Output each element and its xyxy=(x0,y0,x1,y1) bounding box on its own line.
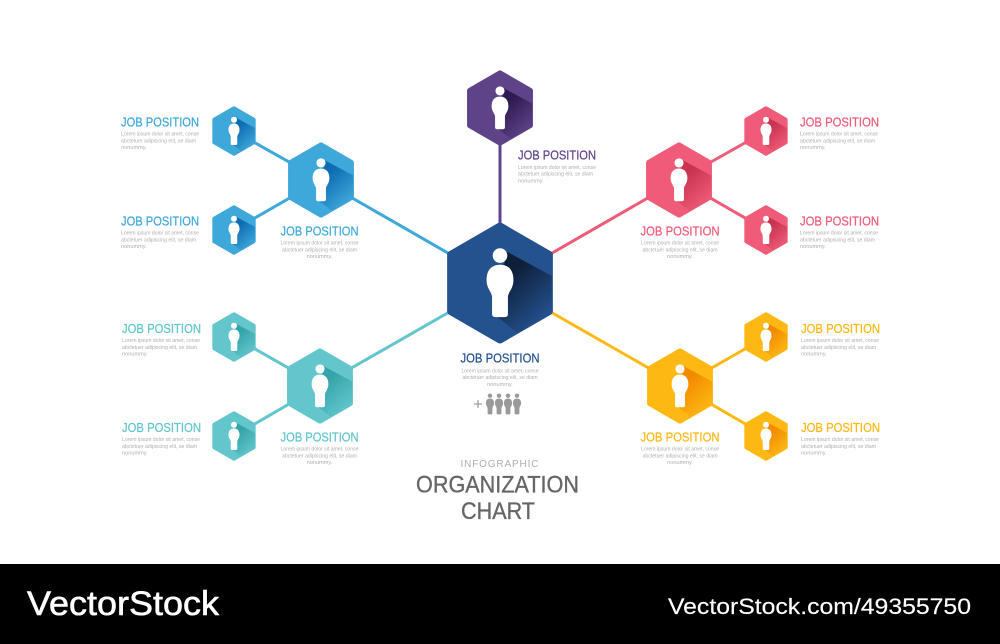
text: blue small top position: JOB POSITION xyxy=(121,116,199,130)
icon: yellow small hexagon bottom xyxy=(746,413,788,459)
connector: blue manager to center xyxy=(321,180,500,283)
icon: blue manager hexagon xyxy=(291,145,355,215)
text: blue small bottom position: nonummy. xyxy=(121,244,147,250)
text: blue manager position: abctetuer adipiscing elit, se diam xyxy=(282,247,357,253)
text: yellow manager position xyxy=(640,430,720,466)
text: yellow manager position: Lorem ipsum dolor sit amet, conse xyxy=(641,447,719,453)
text: blue small top position: nonummy. xyxy=(121,145,147,151)
title: CHART xyxy=(461,498,535,525)
text: yellow small top position: Lorem ipsum dolor sit amet, conse xyxy=(801,338,879,344)
text: teal small top position: abctetuer adipiscing elit, se diam xyxy=(122,345,197,351)
text: purple position: Lorem ipsum dolor sit amet, conse xyxy=(518,165,596,171)
connector: teal manager to center xyxy=(320,283,500,386)
text: teal manager position: JOB POSITION xyxy=(280,430,358,444)
icon: center navy hexagon with person xyxy=(451,227,555,339)
text: yellow small top position: JOB POSITION xyxy=(801,322,880,336)
text: yellow small bottom position: Lorem ipsum dolor sit amet, conse xyxy=(801,437,879,443)
text: blue manager position: Lorem ipsum dolor sit amet, conse xyxy=(280,241,358,247)
text: pink small top position: nonummy. xyxy=(800,145,826,151)
text: teal small top position xyxy=(122,322,201,358)
title: INFOGRAPHIC xyxy=(460,459,538,470)
text: purple position: nonummy. xyxy=(518,178,544,184)
text: pink small bottom position: JOB POSITION xyxy=(800,214,879,228)
connector: purple to center xyxy=(498,108,502,283)
text: center position: nonummy. xyxy=(487,382,513,388)
text: pink manager position: abctetuer adipiscing elit, se diam xyxy=(642,247,718,253)
text: blue small bottom position xyxy=(121,214,199,250)
text: yellow small bottom position: abctetuer adipiscing elit, se diam xyxy=(801,444,876,450)
text: blue small top position xyxy=(121,116,199,151)
text: blue small bottom position: abctetuer adipiscing elit, se diam xyxy=(121,237,196,243)
footer logo: VectorStock xyxy=(27,585,220,623)
text: teal small bottom position: Lorem ipsum dolor sit amet, conse xyxy=(122,437,200,443)
text: pink small top position xyxy=(800,116,879,151)
text: yellow small top position: abctetuer adipiscing elit, se diam xyxy=(801,345,876,351)
text: pink manager position: JOB POSITION xyxy=(640,224,720,238)
icon: pink small hexagon top xyxy=(746,108,788,154)
text: center position: abctetuer adipiscing elit, se diam xyxy=(462,375,538,381)
text: pink small bottom position: Lorem ipsum dolor sit amet, conse xyxy=(800,231,878,237)
connector: teal small bottom to teal manager xyxy=(234,386,320,436)
icon: yellow small hexagon top xyxy=(746,314,788,360)
text: yellow small bottom position xyxy=(801,421,880,456)
text: yellow manager position: JOB POSITION xyxy=(640,430,720,444)
text: teal small bottom position: JOB POSITION xyxy=(122,421,201,435)
text: pink small top position: abctetuer adipiscing elit, se diam xyxy=(800,138,875,144)
title: ORGANIZATION xyxy=(416,472,579,498)
icon: blue small hexagon bottom xyxy=(214,207,256,253)
connector: teal small top to teal manager xyxy=(234,337,320,386)
text: teal small bottom position: abctetuer adipiscing elit, se diam xyxy=(122,444,197,450)
text: purple position xyxy=(518,148,596,184)
text: yellow small top position: nonummy. xyxy=(801,352,827,358)
text: pink small bottom position: nonummy. xyxy=(800,244,826,250)
text: teal manager position: nonummy. xyxy=(307,460,333,466)
text: teal small top position: Lorem ipsum dolor sit amet, conse xyxy=(122,338,200,344)
icon: plus and team of four people xyxy=(474,393,521,414)
text: pink small top position: JOB POSITION xyxy=(800,116,879,130)
text: teal manager position: Lorem ipsum dolor sit amet, conse xyxy=(280,447,358,453)
icon: blue small hexagon top xyxy=(214,108,256,154)
text: pink manager position xyxy=(640,224,720,260)
connector: blue small bottom to blue manager xyxy=(234,180,321,230)
icon: yellow manager hexagon xyxy=(650,351,714,421)
text: teal manager position: abctetuer adipiscing elit, se diam xyxy=(282,453,357,459)
icon: pink manager hexagon xyxy=(649,145,713,215)
text: blue small bottom position: Lorem ipsum dolor sit amet, conse xyxy=(121,231,199,237)
text: yellow manager position: nonummy. xyxy=(667,460,693,466)
text: blue small top position: Lorem ipsum dolor sit amet, conse xyxy=(121,132,199,138)
connector: pink manager to center xyxy=(500,180,679,283)
connector: yellow small bottom to yellow manager xyxy=(680,386,766,436)
text: blue small top position: abctetuer adipiscing elit, se diam xyxy=(121,138,196,144)
connector: pink small bottom to pink manager xyxy=(679,180,766,230)
text: blue manager position: nonummy. xyxy=(307,254,333,260)
footer url: VectorStock.com/49355750 xyxy=(668,594,971,619)
text: pink small bottom position: abctetuer adipiscing elit, se diam xyxy=(800,237,875,243)
text: purple position: abctetuer adipiscing elit, se diam xyxy=(518,172,593,178)
text: teal small bottom position: nonummy. xyxy=(122,450,148,456)
text: blue manager position xyxy=(280,224,358,260)
connector: blue small top to blue manager xyxy=(234,131,321,180)
text: yellow small bottom position: nonummy. xyxy=(801,450,827,456)
text: pink manager position: Lorem ipsum dolor sit amet, conse xyxy=(641,241,719,247)
text: pink small bottom position xyxy=(800,214,879,250)
title xyxy=(416,459,579,525)
text: blue manager position: JOB POSITION xyxy=(280,224,358,238)
icon: pink small hexagon bottom xyxy=(746,207,788,253)
connector: pink small top to pink manager xyxy=(679,131,766,180)
text: yellow manager position: abctetuer adipiscing elit, se diam xyxy=(642,453,718,459)
text: blue small bottom position: JOB POSITION xyxy=(121,214,199,228)
icon: teal small hexagon bottom xyxy=(214,413,256,459)
text: yellow small bottom position: JOB POSITION xyxy=(801,421,880,435)
icon: purple hexagon with person xyxy=(470,73,534,143)
icon: teal small hexagon top xyxy=(214,314,256,360)
text: purple position: JOB POSITION xyxy=(518,148,596,162)
text: teal small top position: nonummy. xyxy=(122,352,148,358)
connector: yellow small top to yellow manager xyxy=(680,337,766,386)
icon: teal manager hexagon xyxy=(290,351,354,421)
connector: yellow manager to center xyxy=(500,283,680,386)
text: teal manager position xyxy=(280,430,358,466)
text: pink small top position: Lorem ipsum dolor sit amet, conse xyxy=(800,132,878,138)
text: teal small top position: JOB POSITION xyxy=(122,322,201,336)
text: center position xyxy=(460,352,540,388)
text: pink manager position: nonummy. xyxy=(667,254,693,260)
text: center position: JOB POSITION xyxy=(460,352,540,366)
text: yellow small top position xyxy=(801,322,880,358)
text: teal small bottom position xyxy=(122,421,201,456)
text: center position: Lorem ipsum dolor sit amet, conse xyxy=(462,368,538,374)
footer band xyxy=(0,564,1000,644)
